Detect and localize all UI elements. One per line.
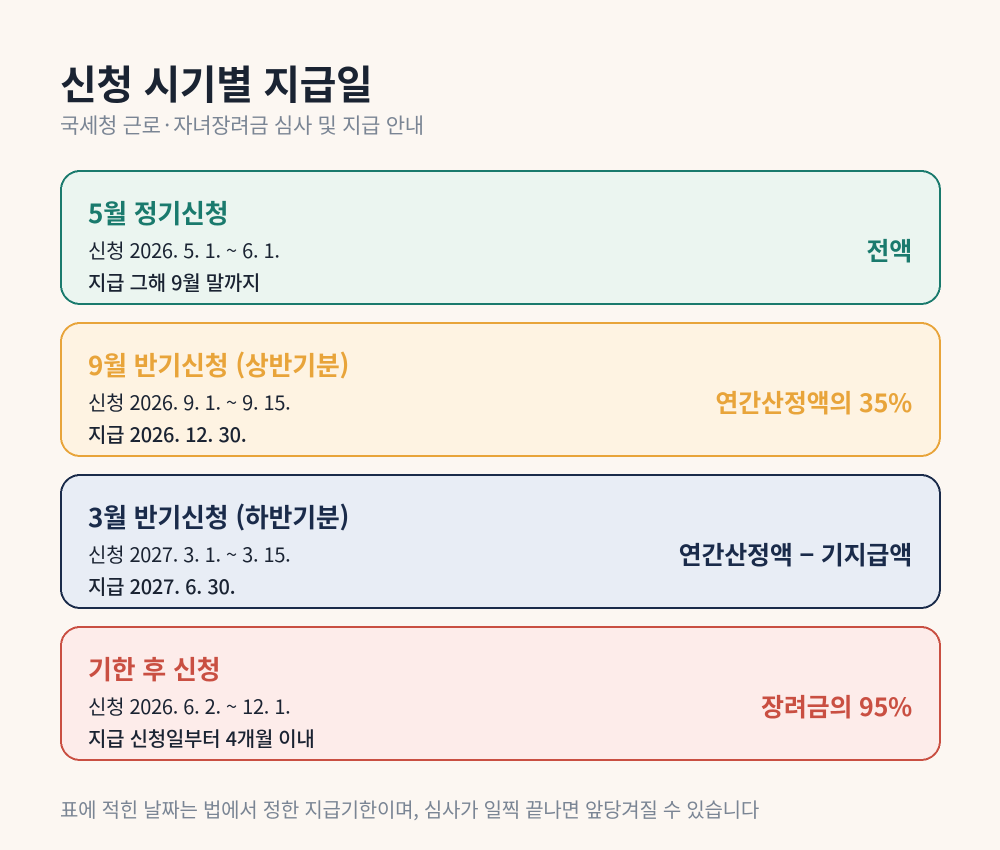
amount: May: 전액 [866, 232, 912, 268]
application dates: late: 신청 2026. 6. 2. ~ 12. 1. [88, 691, 290, 720]
title: 신청 시기별 지급일 [60, 53, 372, 111]
application dates: March: 신청 2027. 3. 1. ~ 3. 15. [88, 539, 290, 568]
application dates: May: 신청 2026. 5. 1. ~ 6. 1. [88, 235, 280, 264]
heading: March: 3월 반기신청 (하반기분) [88, 498, 349, 535]
amount: late: 장려금의 95% [761, 688, 912, 724]
panel: late application [60, 626, 941, 761]
panel: September half-year application [60, 322, 941, 457]
footnote: 표에 적힌 날짜는 법에서 정한 지급기한이며, 심사가 일찍 끝나면 앞당겨질 수 있습니다 [60, 794, 759, 823]
heading: September: 9월 반기신청 (상반기분) [88, 346, 349, 383]
payment date: September: 지급 2026. 12. 30. [88, 419, 246, 448]
amount: March: 연간산정액 − 기지급액 [679, 536, 912, 572]
subtitle: 국세청 근로·자녀장려금 심사 및 지급 안내 [60, 110, 424, 140]
payment date: May: 지급 그해 9월 말까지 [88, 267, 260, 296]
heading: May: 5월 정기신청 [88, 194, 228, 231]
amount: September: 연간산정액의 35% [715, 384, 912, 420]
application dates: September: 신청 2026. 9. 1. ~ 9. 15. [88, 387, 290, 416]
payment date: late: 지급 신청일부터 4개월 이내 [88, 723, 315, 752]
heading: late: 기한 후 신청 [88, 650, 220, 687]
payment date: March: 지급 2027. 6. 30. [88, 571, 235, 600]
panel: May regular application [60, 170, 941, 305]
panel: March half-year application [60, 474, 941, 609]
